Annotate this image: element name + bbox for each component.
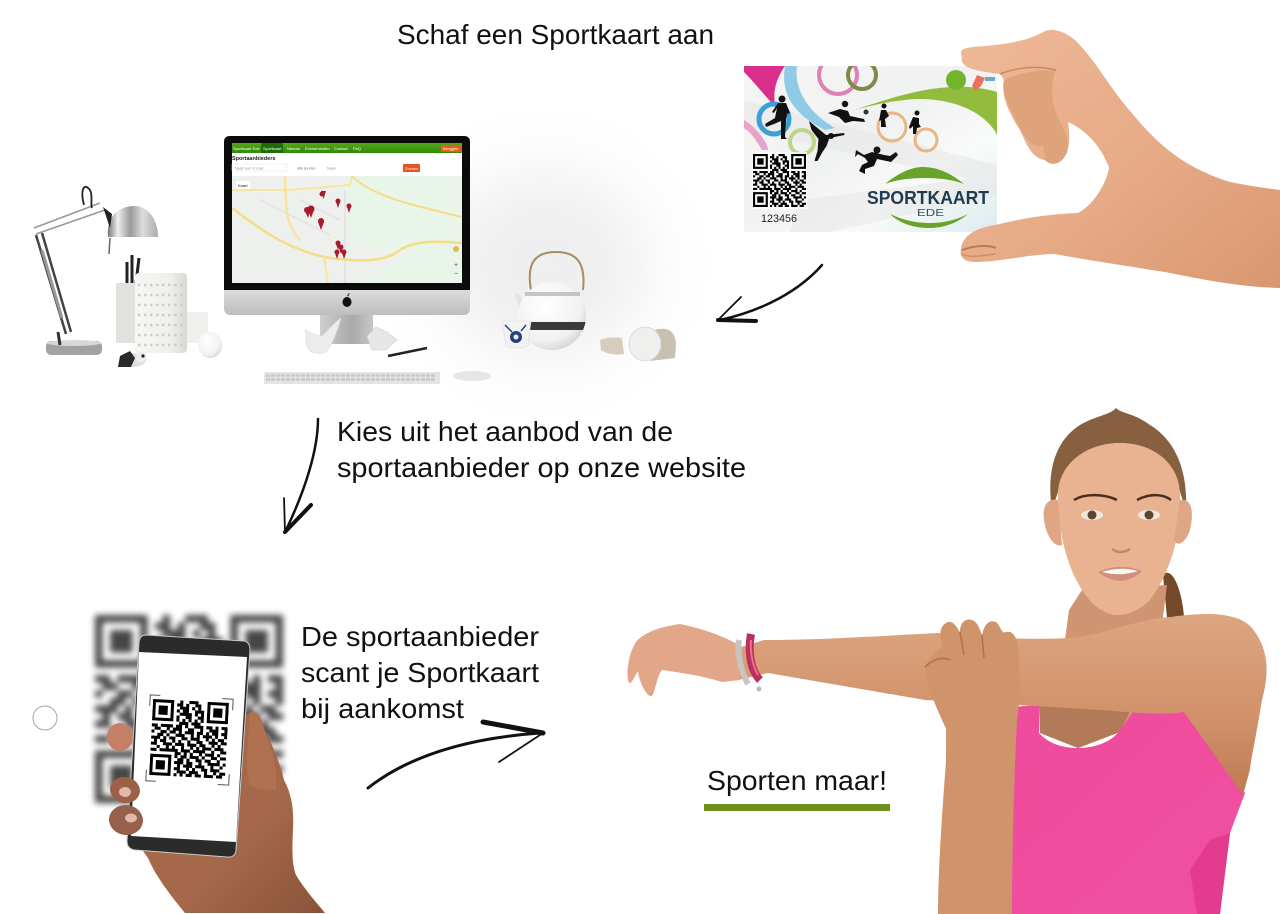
desk lamp	[34, 187, 158, 355]
arrow: website to scan	[284, 419, 318, 532]
hanging hand	[628, 624, 740, 696]
thumb	[247, 712, 276, 790]
sportkaart logo	[867, 167, 989, 228]
desk scene	[34, 136, 676, 384]
sportkaart logo: SPORTKAART	[867, 188, 989, 208]
pencil cup and vases	[116, 255, 222, 358]
website screen: Sportaanbieders	[232, 156, 275, 162]
face	[1058, 443, 1180, 615]
heading: Schaf een Sportkaart aan: Schaf een Sportkaart aan	[397, 19, 714, 50]
hand holding card	[961, 30, 1280, 288]
icon: athlete silhouettes	[765, 96, 921, 174]
torso skin	[946, 690, 1260, 914]
text: Sporten maar!: Sporten maar!	[707, 765, 887, 796]
ponytail	[1163, 573, 1184, 618]
bracelets	[738, 634, 762, 692]
eyes	[1081, 510, 1160, 520]
arrow: scan to sport	[368, 722, 543, 788]
website screen: Sportkaart	[263, 146, 282, 151]
forearm and fist	[925, 620, 1020, 914]
keyboard	[264, 372, 440, 384]
extended arm	[738, 614, 1267, 795]
monitor	[224, 136, 470, 344]
green underline	[704, 804, 890, 811]
nose and mouth	[1098, 549, 1142, 581]
card qr code	[752, 152, 807, 209]
arrow: card to website	[718, 265, 822, 321]
text: De sportaanbieder	[301, 621, 539, 724]
hair	[1050, 408, 1186, 510]
phone qr code	[146, 695, 233, 785]
blurred qr background	[95, 619, 283, 799]
website screen: Evenementen	[305, 146, 330, 151]
website screen: Naam	[327, 166, 336, 170]
teapot	[515, 252, 586, 350]
map: +	[454, 262, 458, 269]
text: Kies uit het aanbod: Kies uit het aanbod van de	[337, 416, 673, 447]
finger behind phone	[107, 723, 133, 751]
mouse	[453, 371, 491, 381]
website screen: Nieuws	[287, 146, 300, 151]
desk shadow	[440, 170, 650, 360]
bird ornament	[305, 318, 341, 353]
map: −	[454, 271, 458, 278]
radio circle	[33, 706, 57, 730]
pink tank top	[1012, 705, 1245, 914]
sports card	[744, 56, 997, 232]
website screen	[232, 143, 462, 283]
icon: apple logo	[342, 293, 352, 307]
website screen: Sportkaart Ede	[233, 146, 260, 151]
card number: 123456	[761, 213, 797, 225]
ears	[1044, 500, 1192, 545]
tea cup	[502, 321, 531, 348]
website screen: Alle sporten	[297, 166, 316, 170]
website screen: Inloggen	[443, 146, 458, 151]
website screen: Contact	[334, 146, 349, 151]
eyebrows	[1074, 495, 1171, 500]
text: De sportaanbieder: scant je Sportkaart	[301, 657, 539, 688]
phone	[127, 635, 250, 857]
website screen: FAQ	[353, 146, 361, 151]
text: De sportaanbieder: De sportaanbieder	[301, 621, 539, 652]
website screen: Naam aan of zoek	[235, 166, 264, 170]
map	[232, 176, 462, 283]
text: De sportaanbieder: bij aankomst	[301, 693, 464, 724]
panda figurine	[118, 351, 146, 367]
phone and hand	[107, 635, 325, 913]
icon: card badges	[946, 70, 995, 91]
pen	[388, 348, 427, 356]
fingers	[107, 774, 145, 837]
map: Kaart	[238, 183, 248, 188]
woman's head	[1044, 408, 1192, 615]
crumpled paper	[367, 327, 397, 350]
woman stretching	[628, 408, 1267, 914]
headphones	[600, 327, 676, 361]
map pins	[304, 191, 352, 259]
hand behind phone	[135, 712, 325, 913]
website screen: Zoeken	[405, 166, 418, 171]
neck	[1065, 585, 1175, 640]
text: Kies uit het aanbod: sportaanbieder op onze website	[337, 452, 746, 483]
text: Kies uit het aanbod	[337, 416, 746, 483]
sportkaart logo: EDE	[917, 208, 944, 219]
